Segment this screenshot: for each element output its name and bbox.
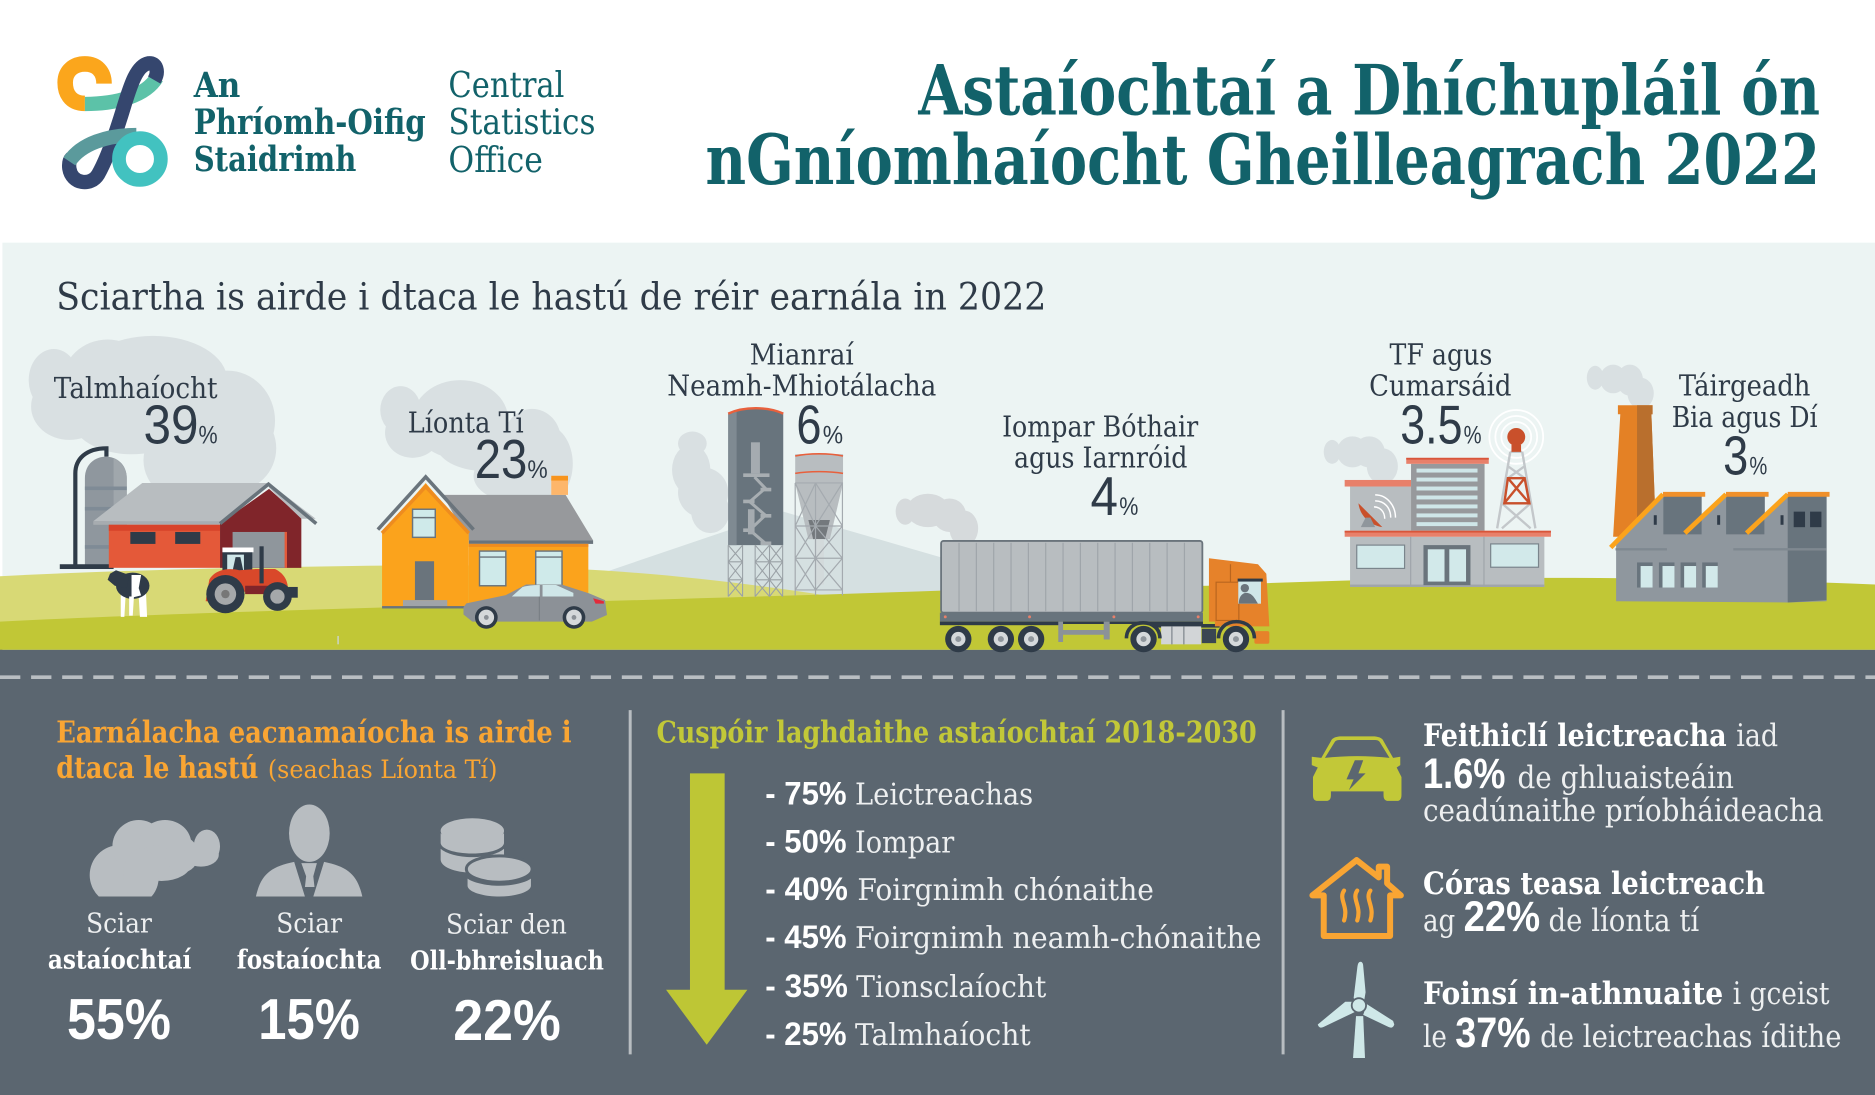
tall silo [728,408,783,597]
cow [108,570,149,617]
text: electric heating: Córas teasa leictreach [1423,866,1765,902]
panel heading: Sciartha is airde i dtaca le hastú de réir earnála in 2022 [56,276,1046,319]
satellite dish [1358,495,1395,527]
text: electric vehicles: de ghluaisteáin [1517,760,1734,796]
text: electric vehicles: Feithiclí leictreacha [1423,718,1727,754]
text: renewable sources [1423,976,1842,1057]
icon: electric car [1312,736,1401,801]
text: renewable sources: le [1423,1019,1447,1055]
stat: emissions share: 55% [67,988,171,1052]
label: IT and communications: % [1464,422,1482,449]
label: agriculture: % [199,422,218,449]
logo text: English name: Office [448,140,543,181]
tractor [206,546,298,613]
target list: - 35% [765,968,848,1004]
label: non-metallic minerals: Neamh-Mhiotálacha [667,369,936,403]
text: electric vehicles: ceadúnaithe príobháideacha [1423,793,1824,829]
text: electric vehicles [1423,718,1824,829]
stat: employment share: fostaíochta [237,944,381,975]
label: IT and communications [1369,338,1511,455]
target list: Leictreachas [855,778,1033,813]
text: renewable sources: Foinsí in-athnuaite [1423,976,1723,1012]
label: agriculture: 39 [143,394,199,455]
smoke clouds [29,336,1654,546]
logo text: Irish name [193,65,426,180]
target list: Foirgnimh chónaithe [857,873,1154,908]
panel: emissions landscape [0,243,1875,652]
label: home heating: 23 [475,428,527,490]
label: food and drink: % [1749,453,1767,481]
text: electric heating: de líonta tí [1549,903,1700,939]
logo text: Irish name: Phríomh-Oifig [194,102,426,143]
hopper silo [795,454,843,595]
label: non-metallic minerals [667,338,936,455]
logo text: English name: Statistics [448,102,596,143]
panel: reduction targets [656,715,1262,1053]
light hill [0,565,825,634]
target list: - 45% [765,919,847,955]
text: electric vehicles: iad [1736,718,1778,754]
icon: heated house [1312,860,1401,936]
sector heading: Earnálacha eacnamaíocha is airde i [56,715,572,750]
title [706,51,1820,201]
label: road and rail [1002,409,1198,527]
IT and communications building [1345,410,1551,587]
label: IT and communications: 3.5 [1400,394,1462,455]
target list: Foirgnimh neamh-chónaithe [855,921,1262,956]
stat: gross value added share: 22% [453,989,561,1053]
logo text: English name: Central [448,65,564,106]
text: electric heating [1423,866,1765,941]
label: road and rail: Iompar Bóthair [1002,409,1198,443]
label: food and drink: 3 [1723,425,1748,487]
label: food and drink: Bia agus Dí [1672,400,1818,434]
label: non-metallic minerals: Mianraí [750,338,855,372]
label: road and rail: 4 [1091,465,1118,527]
factory [1611,405,1830,602]
barn [93,483,316,568]
stat: employment share [237,907,381,1052]
sector heading: dtaca le hastú [56,751,258,786]
target list: - 50% [765,823,847,859]
farm [60,448,316,617]
target list: - 75% [765,776,847,812]
house [378,476,593,608]
small mark [337,636,339,644]
car [463,585,607,629]
label: non-metallic minerals: 6 [796,394,822,455]
signal tower [1489,410,1543,528]
label: food and drink [1672,369,1818,487]
green ground [0,578,1875,650]
target list: Tionsclaíocht [856,970,1046,1005]
text: renewable sources: 37% [1455,1009,1531,1057]
logo text: English name [448,65,596,181]
sector heading [56,715,572,786]
label: home heating: % [527,456,548,484]
label: agriculture [54,371,218,455]
text: renewable sources: i gceist [1733,976,1830,1012]
icon: wind turbine [1318,962,1394,1058]
panel: road and statistics [0,649,1875,1095]
panel: transition indicators [1312,718,1842,1058]
stat: emissions share [48,907,191,1052]
text: electric heating: 22% [1464,893,1540,941]
text: electric heating: ag [1423,903,1455,939]
target list: - 25% [765,1016,847,1052]
stat: employment share: 15% [258,988,360,1052]
panel: top economic sectors [48,715,604,1053]
logo text: Irish name: Staidrimh [194,139,356,180]
icon: coins [441,818,532,897]
arrow: downward reduction [666,773,747,1045]
label: IT and communications: Cumarsáid [1369,369,1511,403]
stat: gross value added share: Oll-bhreisluach [410,945,604,976]
label: home heating: Líonta Tí [408,406,524,440]
stat: gross value added share [410,909,604,1053]
target list: - 40% [765,871,848,907]
target list [765,776,1262,1053]
targets heading: Cuspóir laghdaithe astaíochtaí 2018-2030 [656,715,1257,750]
label: agriculture: Talmhaíocht [54,371,218,405]
logo text: Irish name: An [193,65,240,106]
silo [60,448,127,569]
label: road and rail: agus Iarnróid [1014,440,1187,474]
label: non-metallic minerals: % [823,422,843,449]
stat: emissions share: astaíochtaí [48,944,191,975]
stat: emissions share: Sciar [86,907,153,939]
target list: Talmhaíocht [855,1018,1031,1053]
stat: gross value added share: Sciar den [446,909,567,941]
mountain [586,512,957,598]
logo mark [65,63,161,182]
label: food and drink: Táirgeadh [1679,369,1810,403]
text: electric vehicles: 1.6% [1423,750,1506,798]
label: home heating [408,406,548,490]
icon: employee [256,805,362,897]
target list: Iompar [855,825,955,860]
label: IT and communications: TF agus [1390,338,1492,372]
stat: employment share: Sciar [276,907,343,939]
mineral silos [728,408,843,597]
label: road and rail: % [1119,493,1138,521]
truck [940,541,1269,652]
icon: emissions cloud [90,820,220,905]
sector heading: (seachas Líonta Tí) [268,755,497,784]
panel: header [65,51,1820,201]
text: renewable sources: de leictreachas ídithe [1540,1019,1842,1055]
